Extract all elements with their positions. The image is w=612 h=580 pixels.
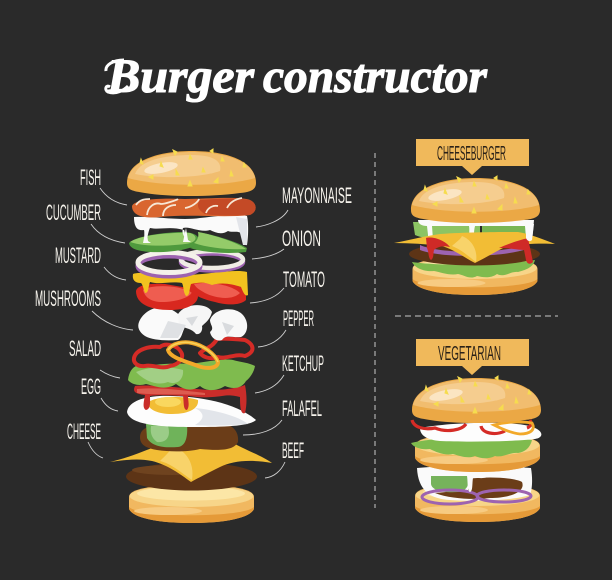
divider: vertical [374,153,376,508]
labels: right ingredients: TOMATO [283,267,325,292]
layer: tomato [136,280,246,310]
divider: horizontal [395,315,558,317]
label: beef [265,438,304,478]
title [106,50,488,103]
mayonnaise [418,220,534,242]
layer: mustard [133,271,248,296]
label: egg [81,374,118,411]
onion [420,245,527,256]
label: cheese [67,419,103,458]
egg [420,423,541,442]
title: Burger [106,50,255,103]
label: cucumber [46,200,125,243]
label: mustard [55,243,126,280]
ketchup [426,237,533,264]
labels: right ingredients: PEPPER [283,306,314,331]
lettuce [411,437,532,458]
label: mustard: MUSTARD [55,243,101,268]
label: falafel [243,396,322,435]
label: salad: SALAD [69,336,101,361]
bottom bun [412,257,538,295]
tag: vegetarian [416,339,529,375]
labels: left ingredients: CHEESE [67,419,101,444]
label: pepper [258,306,314,347]
labels: right ingredients: KETCHUP [282,351,324,376]
layer: mushrooms [138,305,247,341]
panel: vegetarian [411,339,541,522]
layer: onion rings [138,251,243,276]
label: fish [80,165,127,205]
layer: beef patty [126,462,257,490]
red pepper [412,420,531,433]
burger: main exploded constructor [110,149,272,523]
layer: bottom bun [129,485,254,523]
cheese highlight [452,236,476,262]
onion [422,490,531,504]
layer: salad [128,359,255,390]
label: mayonnaise [256,183,352,227]
labels: right ingredients: BEEF [282,438,304,463]
middle bun [415,434,540,472]
mayonnaise drips [420,468,530,492]
layer: ketchup [134,385,246,413]
label: ketchup [255,351,324,393]
tag: vegetarian: VEGETARIAN [438,343,501,365]
tag: cheeseburger: CHEESEBURGER [437,143,506,165]
label: mushrooms: MUSHROOMS [35,286,101,311]
label: salad [69,336,120,378]
falafel [431,476,523,499]
labels: right ingredients [243,183,352,478]
burger: vegetarian [411,376,541,522]
beef [409,242,540,266]
layer: cheese [110,444,272,482]
labels: right ingredients: FALAFEL [282,396,322,421]
label: egg: EGG [81,374,101,399]
label: onion [252,226,321,259]
layer: top bun [127,149,256,196]
lettuce [412,260,535,278]
layer: falafel [140,424,238,451]
label: fish: FISH [80,165,101,190]
label: mushrooms [35,286,133,330]
top bun [412,376,541,423]
mayonnaise front drip [526,224,534,241]
panel: cheeseburger [394,139,555,295]
text: MAYONNAISE [282,183,352,208]
label: onion: ONION [282,226,321,251]
layer: pepper rings [134,339,252,368]
cucumber [413,222,531,239]
layer: fish [132,198,256,217]
top bun [411,176,540,223]
layer: egg [127,396,256,427]
burger: cheeseburger [394,176,555,295]
title: constructor [263,50,488,103]
labels: left ingredients [35,165,133,458]
tag: cheeseburger [416,139,529,175]
cheese [394,232,555,263]
layer: mayonnaise [134,215,248,245]
bottom bun [415,484,540,522]
label: cucumber: CUCUMBER [46,200,101,225]
yellow pepper [494,422,533,434]
mayonnaise back [417,466,532,501]
label: tomato [250,267,325,303]
layer: cucumber [129,232,247,253]
